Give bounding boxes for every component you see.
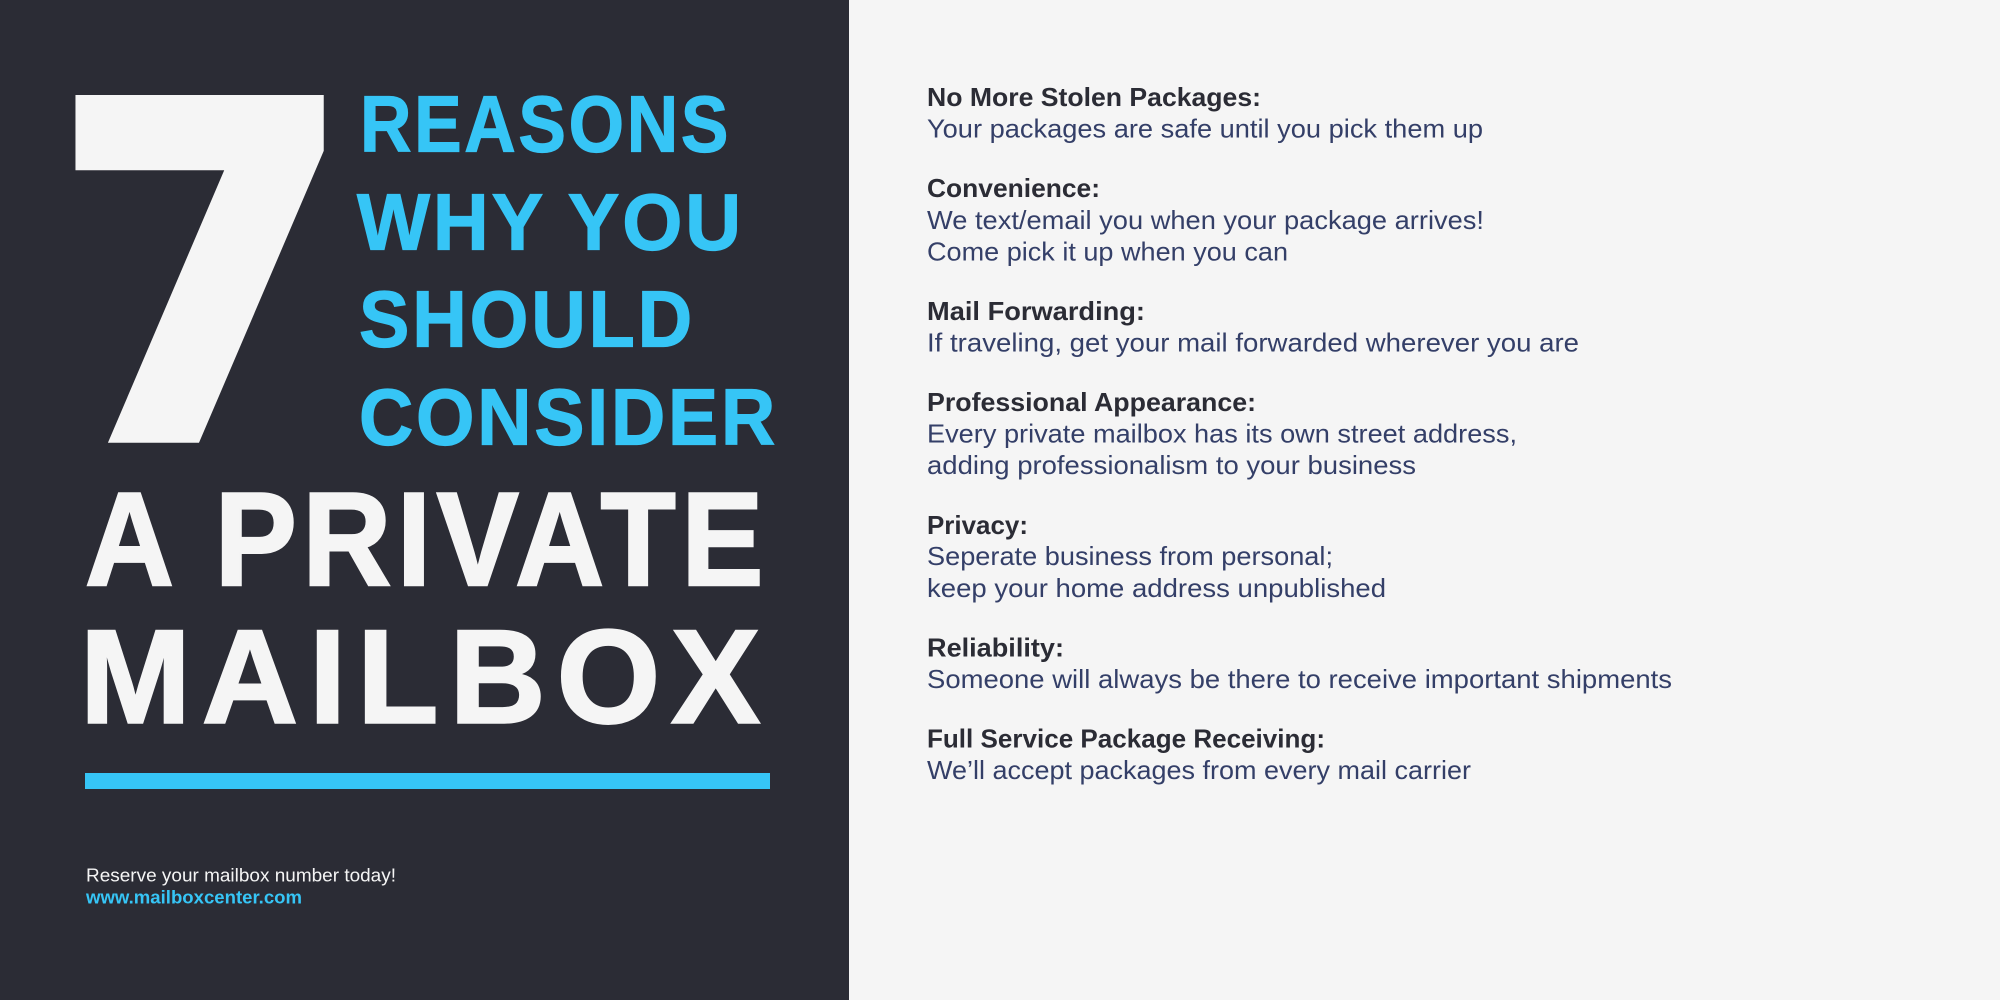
reason: professional appearance: Professional Appearance: — [927, 387, 1256, 417]
reason: full service package receiving — [927, 724, 1471, 785]
reason: reliability: Someone will always be there to receive important shipments — [927, 664, 1672, 694]
reason: mail forwarding: If traveling, get your mail forwarded wherever you are — [927, 328, 1579, 358]
heading: reasons why you should consider — [357, 80, 778, 462]
heading: reasons why you should consider: REASONS — [360, 80, 731, 168]
reason: convenience: We text/email you when your package arrives! — [927, 205, 1484, 235]
heading: a private mailbox — [80, 466, 769, 752]
reason: convenience: Convenience: — [927, 173, 1100, 203]
reason: convenience: Come pick it up when you can — [927, 236, 1288, 266]
reason: full service package receiving: Full Service Package Receiving: — [927, 724, 1325, 754]
panel: dark left background — [0, 0, 849, 1000]
heading: reasons why you should consider: WHY YOU — [357, 178, 744, 266]
big numeral 7: 7 — [52, 10, 353, 546]
reason: mail forwarding: Mail Forwarding: — [927, 296, 1145, 326]
reason: mail forwarding — [927, 296, 1579, 358]
reason: reliability — [927, 632, 1672, 694]
call to action: Reserve your mailbox number today! — [86, 864, 396, 886]
accent bar — [85, 773, 770, 789]
reason: no more stolen packages — [927, 82, 1483, 144]
reason: privacy: keep your home address unpublished — [927, 573, 1386, 603]
reason: professional appearance: adding professionalism to your business — [927, 450, 1416, 480]
reason: no more stolen packages: No More Stolen Packages: — [927, 82, 1261, 112]
reason: full service package receiving: We’ll accept packages from every mail carrier — [927, 755, 1471, 785]
reason: privacy: Privacy: — [927, 510, 1028, 540]
heading: a private mailbox: MAILBOX — [80, 604, 760, 752]
reason: professional appearance: Every private mailbox has its own street address, — [927, 418, 1517, 448]
reason: convenience — [927, 173, 1484, 266]
reason: privacy: Seperate business from personal; — [927, 541, 1333, 571]
reason: reliability: Reliability: — [927, 632, 1064, 662]
reason: professional appearance — [927, 387, 1517, 480]
reason list — [927, 82, 1672, 785]
heading: reasons why you should consider: SHOULD — [359, 274, 695, 364]
reason: privacy — [927, 510, 1386, 603]
heading: a private mailbox: A PRIVATE — [85, 466, 769, 614]
heading: reasons why you should consider: CONSIDER — [359, 372, 778, 462]
call to action: www.mailboxcenter.com — [85, 886, 302, 908]
call to action — [85, 864, 396, 908]
reason: no more stolen packages: Your packages are safe until you pick them up — [927, 114, 1483, 144]
